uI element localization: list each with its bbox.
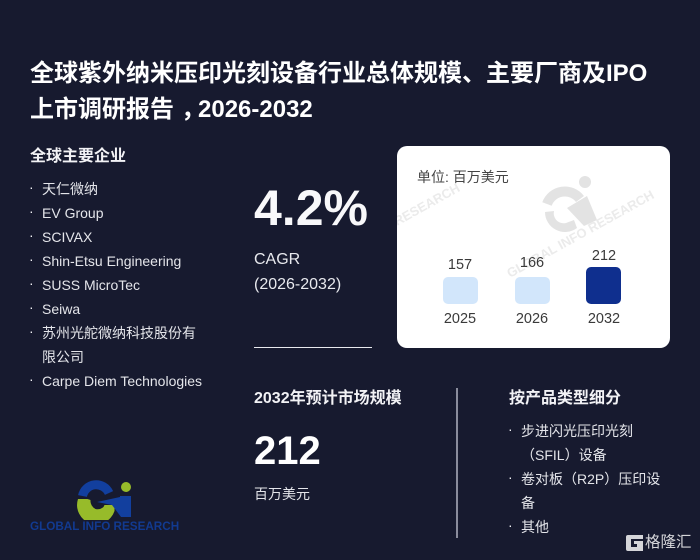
CAGR label: CAGR [254,251,300,268]
bar 2032: 212 [592,248,616,264]
bar 2025 [443,257,478,327]
company list: · [29,203,34,219]
company list: SUSS MicroTec [42,277,140,293]
company list: 苏州光舵微纳科技股份有 [42,325,196,341]
market size value: 212 [254,429,321,473]
product types list: · [508,517,513,533]
company list: · [29,227,34,243]
company list: · [29,371,34,387]
product types list: （SFIL）设备 [521,447,607,463]
logo name: 格隆汇 [645,534,692,551]
product types list: · [508,469,513,485]
bar 2026: 2026 [516,311,548,327]
company list: · [29,179,34,195]
product types list: 卷对板（R2P）压印设 [521,471,660,487]
company list: · [29,251,34,267]
company list [29,179,202,389]
logo G icon [626,535,643,551]
company list: 天仁微纳 [42,181,98,197]
company list: 限公司 [42,349,84,365]
bar 2026 [515,255,550,327]
market size unit: 百万美元 [254,486,310,502]
bar 2032 [586,248,621,327]
CAGR label [254,251,341,293]
watermark logo [397,176,657,281]
company list: SCIVAX [42,229,92,245]
CAGR stat [254,180,368,293]
logo: Gelonghui [626,534,692,551]
panel: product types [508,389,660,535]
bar 2032: 2032 [588,311,620,327]
product types list: 步进闪光压印光刻 [521,423,633,439]
company list: · [29,323,34,339]
company list: Carpe Diem Technologies [42,373,202,389]
product types heading: 按产品类型细分 [509,390,621,407]
bar 2025: 2025 [444,311,476,327]
company list: Shin-Etsu Engineering [42,253,181,269]
panel: key companies [29,147,202,389]
panel: bar chart card [397,146,670,348]
heading: key companies: 全球主要企业 [30,148,126,165]
logo mark [77,480,131,520]
company list: Seiwa [42,301,80,317]
logo: Global Info Research [30,480,179,533]
company list: · [29,275,34,291]
product types list [508,421,660,535]
chart unit label: 单位: 百万美元 [417,169,509,185]
product types list: · [508,421,513,437]
title: 全球紫外纳米压印光刻设备行业总体规模、主要厂商及IPO [30,60,647,87]
market size heading: 2032年预计市场规模 [254,390,402,407]
CAGR label: (2026-2032) [254,276,341,293]
logo text: GLOBAL INFO RESEARCH [30,520,179,533]
watermark logo: GLOBAL INFO RESEARCH [504,187,657,281]
title: 上市调研报告 ，2026-2032 [30,96,313,123]
panel: 2032 market size [254,389,402,502]
title [30,60,647,123]
product types list: 其他 [521,519,549,535]
CAGR value: 4.2% [254,180,368,236]
bar 2026: 166 [520,255,544,271]
bar 2025: 157 [448,257,472,273]
company list: EV Group [42,205,103,221]
company list: · [29,299,34,315]
product types list: 备 [521,495,535,511]
